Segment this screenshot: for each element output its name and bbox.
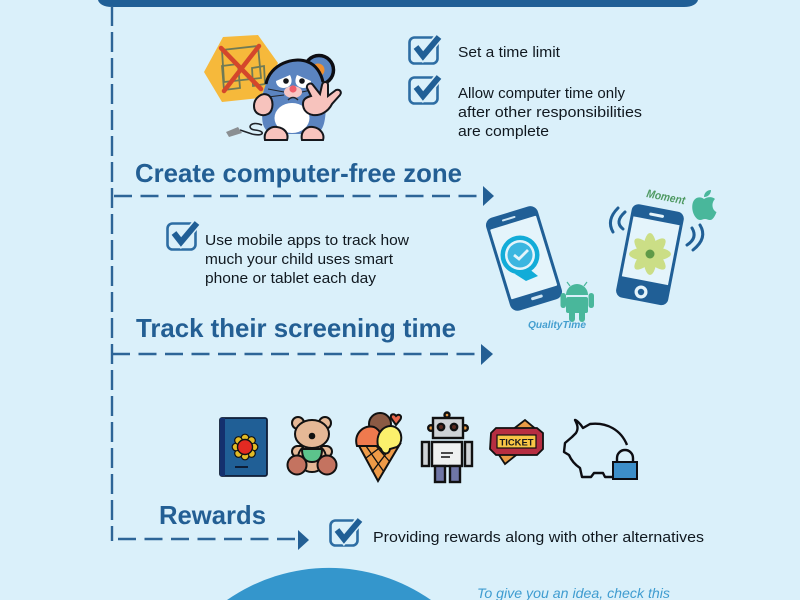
mouse whiskers [268, 89, 316, 97]
heading: track their screening time: Track their screening time [136, 313, 456, 343]
icon: QualityTime phone [484, 204, 564, 313]
text: allow computer time [458, 85, 642, 140]
text: allow computer time: after other responsibilities [458, 104, 642, 121]
arrow: computer-free zone [114, 186, 494, 206]
icon: robot [422, 412, 472, 482]
icon: Moment phone [615, 203, 685, 306]
label: QualityTime: QualityTime [528, 319, 586, 331]
text: set a time limit: Set a time limit [458, 44, 561, 61]
icon: book [220, 418, 267, 476]
icon: ice cream [356, 413, 401, 481]
text: allow computer time: are complete [458, 123, 549, 140]
text: allow computer time: Allow computer time only [458, 85, 625, 102]
icon: crossed computer hexagon [204, 35, 278, 102]
icon: android logo [560, 282, 594, 322]
text: mobile apps [205, 232, 409, 287]
arrow: screening time [112, 344, 493, 365]
text: providing rewards: Providing rewards along with other alternatives [373, 529, 704, 546]
icon: ticket [490, 420, 543, 464]
text: mobile apps: much your child uses smart [205, 251, 394, 268]
top banner bar [98, 0, 698, 7]
heading: create computer-free zone: Create computer-free zone [135, 158, 462, 188]
icon: vibration waves [610, 208, 703, 250]
mouse feet [265, 127, 288, 140]
checkbox: time limit [410, 37, 439, 64]
text: mobile apps: phone or tablet each day [205, 270, 377, 287]
icon: teddy bear [288, 417, 336, 474]
icon: piggy bank with lock [564, 420, 637, 479]
mouse ear [304, 56, 334, 84]
icon: mouse refusing computer [204, 35, 341, 140]
icon: ticket: TICKET [500, 438, 534, 448]
label: Moment: Moment [645, 188, 687, 208]
mouse body [262, 60, 326, 134]
mouse tail and cable [240, 123, 262, 135]
mouse hands [254, 94, 272, 115]
blue circle [227, 568, 431, 600]
heading: rewards: Rewards [159, 500, 266, 530]
mouse nose and mouth [284, 86, 302, 98]
checkbox: mobile apps [168, 223, 197, 250]
mouse eyes [276, 75, 292, 88]
dashed timeline vertical [111, 6, 113, 541]
checkbox: rewards [330, 520, 360, 546]
icon: apple logo [692, 190, 716, 220]
checkbox: computer time [410, 77, 439, 104]
text: mobile apps: Use mobile apps to track how [205, 232, 409, 249]
arrow: rewards [118, 530, 309, 550]
